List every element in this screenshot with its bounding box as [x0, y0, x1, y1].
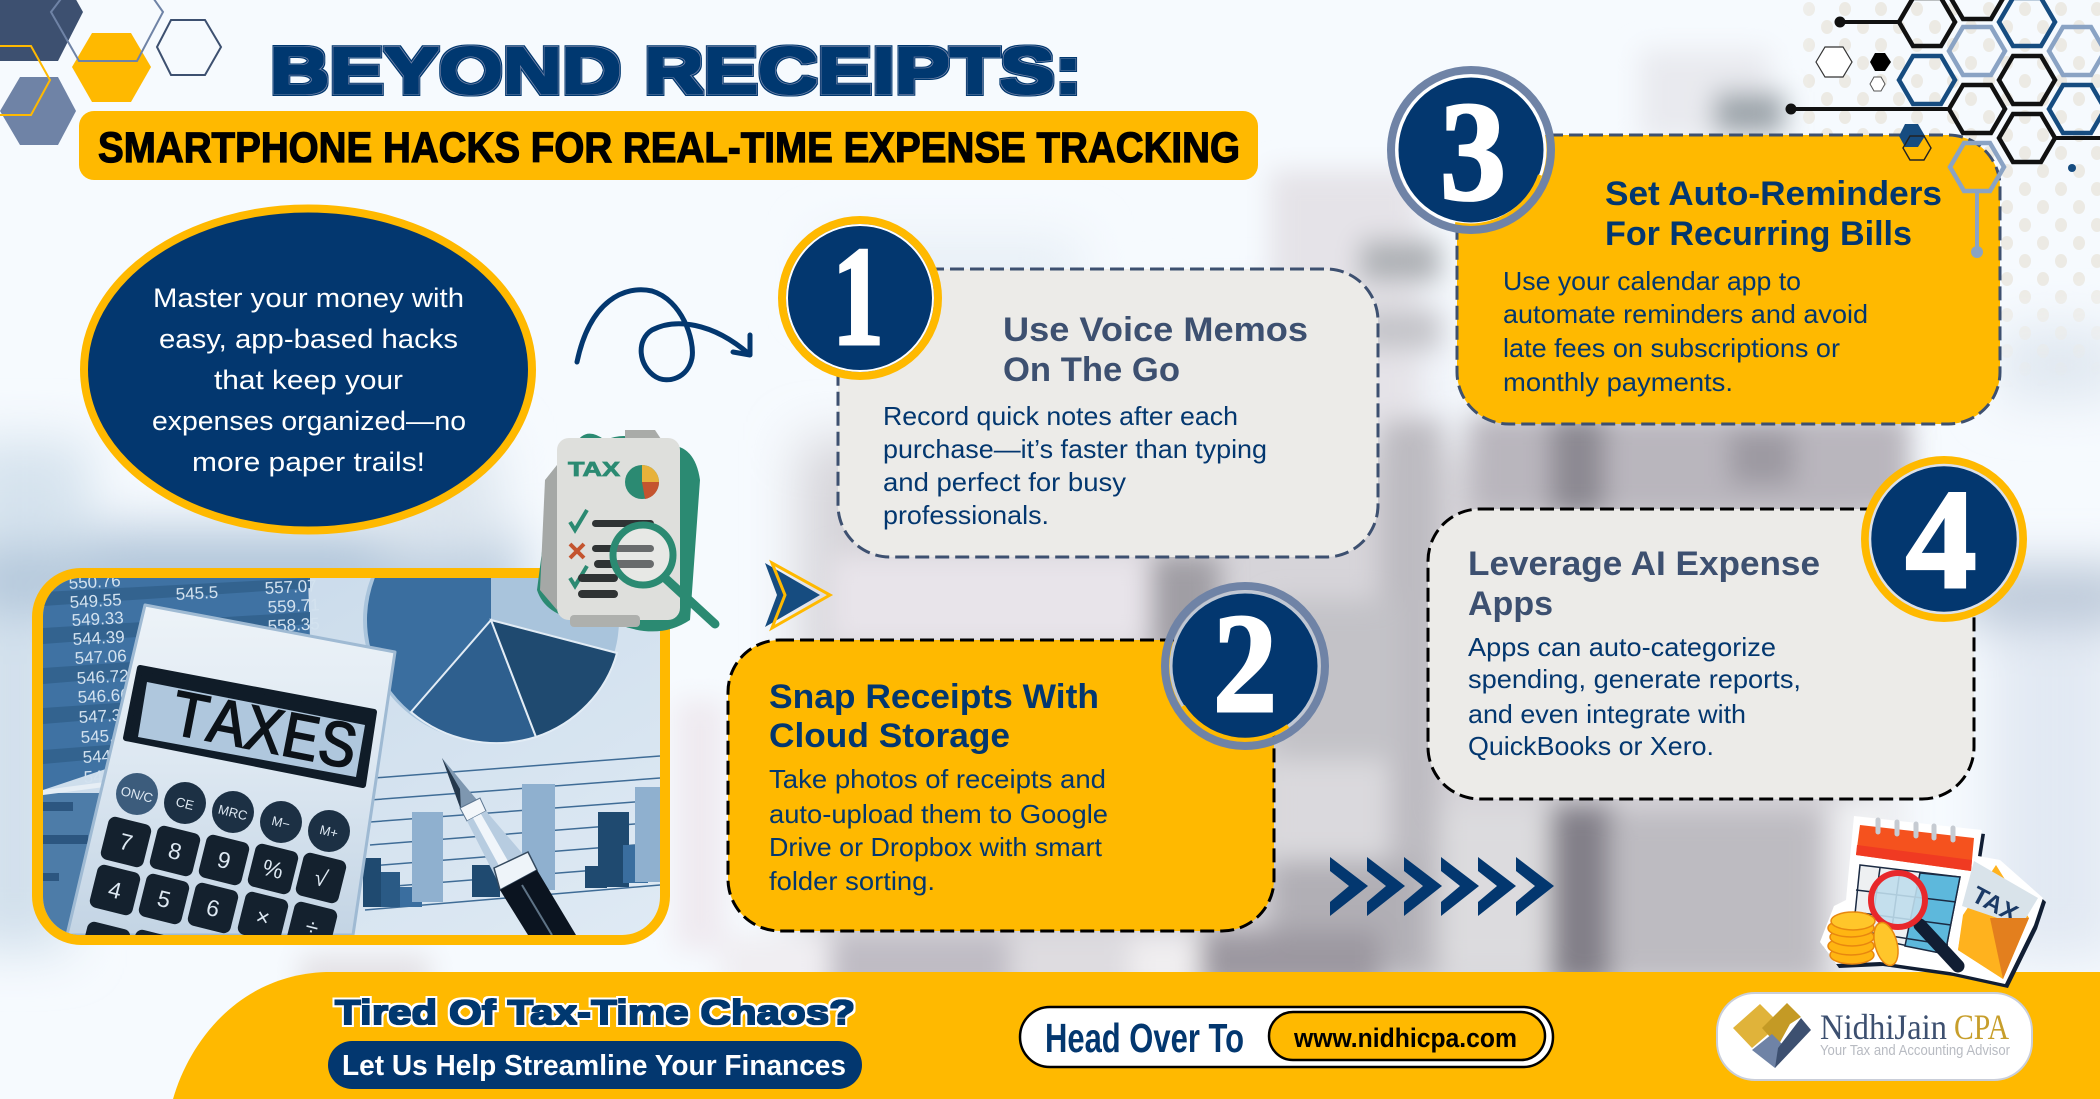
panel: step 1 voice memos: Use Voice Memos — [1003, 311, 1308, 349]
curly arrow — [577, 290, 750, 380]
panel: step 2 snap receipts — [728, 584, 1325, 931]
number badge 1: 1 — [832, 217, 884, 375]
panel: step 2 snap receipts: auto-upload them to Google — [769, 799, 1108, 829]
decorative hexagons: top left — [0, 0, 221, 145]
calculator: 9 — [215, 846, 233, 874]
footer: website pill — [1020, 1007, 1553, 1067]
accent hexagons on step 3 — [1899, 124, 2004, 258]
photo: calculator with TAXES on display and charts: 559.71 — [267, 595, 320, 617]
panel: step 1 voice memos: On The Go — [1003, 351, 1180, 389]
icon: tax document with magnifier: TAX — [568, 459, 621, 481]
intro ellipse: more paper trails! — [192, 447, 425, 477]
calculator: CE — [174, 794, 196, 813]
number badge 3 — [1391, 70, 1551, 230]
panel: step 4 AI expense apps — [1428, 460, 2023, 799]
calculator: M− — [270, 813, 292, 832]
panel: step 3 auto-reminders: Set Auto-Reminders — [1605, 175, 1942, 213]
panel: step 4 AI expense apps: QuickBooks or Xero. — [1468, 731, 1714, 761]
calculator — [66, 604, 396, 935]
intro ellipse — [84, 208, 532, 530]
panel: step 1 voice memos: Record quick notes after each — [883, 401, 1238, 431]
panel: step 3 auto-reminders: automate reminders and avoid — [1503, 299, 1868, 329]
decorative hexagon network: top right — [1786, 0, 2100, 348]
panel: step 1 voice memos: professionals. — [883, 500, 1049, 530]
photo: calculator with TAXES on display and charts: 550.76 — [68, 571, 121, 593]
number badge 1 — [782, 217, 938, 376]
panel: step 1 voice memos: and perfect for busy — [883, 467, 1126, 497]
panel: step 4 AI expense apps: Apps can auto-categorize — [1468, 632, 1776, 662]
footer: website pill: Head Over To — [1045, 1015, 1244, 1061]
calculator: MRC — [217, 802, 249, 823]
photo: calculator with TAXES on display and charts: 549.55 — [69, 590, 122, 612]
panel: step 2 snap receipts: Drive or Dropbox with smart — [769, 832, 1103, 862]
calculator: % — [260, 854, 286, 884]
subtitle banner: SMARTPHONE HACKS FOR REAL-TIME EXPENSE TRACKING — [98, 125, 1240, 172]
calculator: TAXES — [164, 679, 363, 789]
calculator: 4 — [106, 876, 125, 904]
panel: step 1 voice memos — [782, 217, 1378, 557]
panel: step 1 voice memos: purchase—it’s faster than typing — [883, 434, 1267, 464]
panel: step 3 auto-reminders: late fees on subscriptions or — [1503, 333, 1840, 363]
intro ellipse: that keep your — [214, 365, 403, 395]
panel: step 4 AI expense apps: Leverage AI Expense — [1468, 545, 1820, 583]
panel: step 3 auto-reminders — [1391, 70, 2000, 424]
panel: step 4 AI expense apps: spending, generate reports, — [1468, 664, 1801, 694]
coins — [1828, 912, 1902, 968]
icon: logo diamond — [1733, 1003, 1811, 1068]
panel: step 4 AI expense apps: and even integrate with — [1468, 699, 1746, 729]
calculator: ÷ — [303, 913, 321, 941]
panel: step 4 AI expense apps: Apps — [1468, 585, 1553, 623]
logo: Nidhi Jain CPA: CPA — [1954, 1007, 2009, 1047]
photo: calculator with TAXES on display and charts: 545.5 — [175, 583, 219, 604]
calculator: M+ — [318, 822, 340, 841]
footer band — [173, 972, 2100, 1099]
photo: calculator with TAXES on display and charts: 546.72 — [76, 666, 129, 688]
intro ellipse: easy, app-based hacks — [159, 324, 458, 354]
number badge 4: 4 — [1906, 460, 1976, 618]
photo: calculator with TAXES on display and charts: 558.35 — [267, 614, 320, 636]
photo: calculator with TAXES on display and charts: 547.35 — [78, 705, 131, 727]
intro ellipse: Master your money with — [153, 283, 464, 313]
photo: calculator with TAXES on display and charts: 544.39 — [72, 627, 125, 649]
subtitle banner — [79, 111, 1258, 180]
photo: calculator with TAXES on display and charts: 549.33 — [71, 608, 124, 630]
footer: call-to-action pill: Let Us Help Streamline Your Finances — [342, 1050, 846, 1082]
photo: calculator with TAXES on display and charts: 546.66 — [77, 685, 130, 707]
logo: Nidhi Jain CPA: Your Tax and Accounting Advisor — [1820, 1043, 2010, 1059]
title: BEYOND RECEIPTS: — [270, 34, 1082, 107]
panel: step 2 snap receipts: Take photos of receipts and — [769, 764, 1106, 794]
intro ellipse: expenses organized—no — [152, 406, 466, 436]
pen — [442, 758, 576, 935]
bar chart — [363, 756, 660, 910]
tax envelope — [1958, 861, 2038, 979]
calculator: 8 — [166, 837, 184, 865]
photo: calculator with TAXES on display and charts: 557.07 — [264, 576, 317, 598]
calculator: √ — [312, 864, 331, 892]
logo: Nidhi Jain CPA — [1717, 993, 2032, 1080]
number badge 2 — [1165, 584, 1325, 746]
panel: step 2 snap receipts: folder sorting. — [769, 866, 935, 896]
panel: step 3 auto-reminders: For Recurring Bills — [1605, 215, 1912, 253]
icon: calendar, coins, magnifier and tax envelope sticker — [1820, 816, 2046, 988]
number badge 4 — [1865, 460, 2023, 618]
number badge 2: 2 — [1213, 584, 1277, 742]
arrow chevron to step 2 — [765, 563, 830, 628]
footer: call-to-action heading: Tired Of Tax-Time Chaos? — [335, 994, 855, 1032]
footer: call-to-action pill — [328, 1041, 862, 1089]
footer: website pill: www.nidhicpa.com — [1293, 1023, 1517, 1053]
magnifier — [1871, 873, 1958, 966]
calculator: 5 — [155, 885, 173, 913]
photo: calculator with TAXES on display and charts: 547.06 — [74, 646, 127, 668]
photo: calculator with TAXES on display and charts: 545.8 — [80, 726, 124, 747]
panel: step 3 auto-reminders: monthly payments. — [1503, 367, 1733, 397]
pie chart — [363, 578, 619, 744]
number badge 3: 3 — [1440, 72, 1506, 230]
calculator: × — [253, 903, 273, 931]
photo: calculator with TAXES on display and charts — [32, 568, 670, 945]
panel: step 2 snap receipts: Cloud Storage — [769, 717, 1010, 755]
arrow row: six chevrons — [1330, 857, 1554, 916]
calculator: 6 — [204, 894, 222, 922]
panel: step 3 auto-reminders: Use your calendar app to — [1503, 266, 1801, 296]
panel: step 2 snap receipts: Snap Receipts With — [769, 678, 1099, 716]
tax envelope: TAX — [1967, 881, 2022, 928]
logo: Nidhi Jain CPA: NidhiJain — [1820, 1007, 1947, 1047]
photo: calculator with TAXES on display and charts: 54 — [83, 767, 103, 787]
icon: tax document with magnifier — [537, 430, 715, 631]
calculator: 7 — [117, 828, 135, 856]
calculator: ON/C — [119, 783, 154, 806]
photo: calculator with TAXES on display and charts: 544 — [82, 747, 112, 767]
